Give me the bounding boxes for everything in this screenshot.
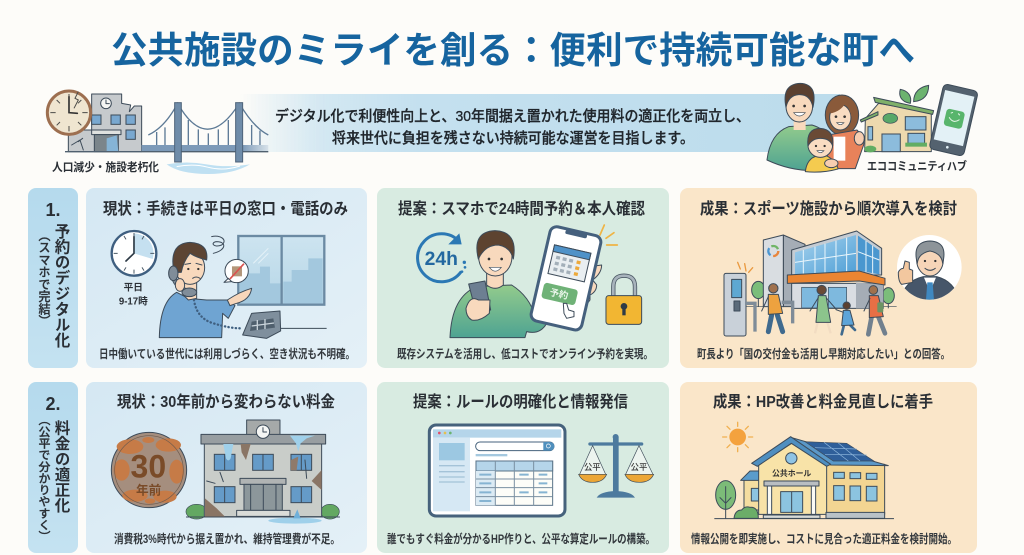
caption: 消費税3%時代から据え置かれ、維持管理費が不足。 [114,531,340,546]
heading: 現状：30年前から変わらない料金 [117,392,335,411]
illustration: fee web page and scales: 公平 [631,462,647,472]
panel: result, row 1 [680,188,977,368]
row 1 label: reservation digitalization: （スマホで完結） [37,229,51,327]
icon: aging facilities, clock and bridge [47,91,268,174]
illustration: 24-hour smartphone booking [418,225,642,338]
banner band [240,94,840,152]
row 2 label: fee optimization: 2. [45,394,61,414]
illustration: sun and public hall with solar roof [714,422,894,519]
title: 公共施設のミライを創る：便利で持続可能な町へ [111,30,915,71]
illustration: 24-hour smartphone booking: 24h [425,249,458,270]
caption: 既存システムを活用し、低コストでオンライン予約を実現。 [397,346,653,361]
illustration: sports facility and mayor [724,231,962,336]
row 2 label: fee optimization: 料金の適正化 [52,420,70,513]
illustration: phone-only weekday reception: 9-17時 [119,295,148,307]
caption: 日中働いている世代には利用しづらく、空き状況も不明確。 [99,346,355,361]
caption: 誰でもすぐ料金が分かるHP作りと、公平な算定ルールの構築。 [387,531,655,546]
illustration: rusty coin and aging building: 30 [131,449,166,485]
heading: 成果：HP改善と料金見直しに着手 [713,392,933,411]
heading: 成果：スポーツ施設から順次導入を検討 [700,199,957,218]
label: population decline: 人口減少・施設老朽化 [52,160,159,174]
panel: current state, row 2 [86,382,367,553]
row 2 label: fee optimization [28,382,78,553]
icon: family, eco community hub and smartphone [767,83,978,172]
row 1 label: reservation digitalization: 予約のデジタル化 [52,223,70,348]
heading: 現状：手続きは平日の窓口・電話のみ [103,199,348,218]
panel: proposal, row 2 [377,382,669,553]
illustration: phone-only weekday reception [112,231,327,338]
banner text: デジタル化で利便性向上と、30年間据え置かれた使用料の適正化を両立し、 [275,107,750,125]
illustration: sun and public hall with solar roof: 公共ホール [772,468,811,478]
panel: result, row 2 [680,382,977,553]
row 1 label: reservation digitalization: 1. [45,200,61,220]
caption: 情報公開を即実施し、コストに見合った適正料金を検討開始。 [691,531,957,546]
heading: 提案：スマホで24時間予約＆本人確認 [398,199,645,218]
row 1 label: reservation digitalization [28,188,78,368]
illustration: rusty coin and aging building: 年前 [136,482,162,497]
caption: 町長より「国の交付金も活用し早期対応したい」との回答。 [697,346,950,361]
illustration: fee web page and scales: 公平 [584,462,601,472]
heading: 提案：ルールの明確化と情報発信 [413,392,628,411]
banner text [275,107,750,147]
banner text: 将来世代に負担を残さない持続可能な運営を目指します。 [332,129,694,147]
label: eco community hub: エココミュニティハブ [867,159,967,173]
illustration: rusty coin and aging building [111,420,340,524]
illustration: phone-only weekday reception: 平日 [124,283,143,294]
panel: proposal, row 1 [377,188,669,368]
illustration: fee web page and scales [429,425,654,516]
panel: current state, row 1 [86,188,367,368]
row 2 label: fee optimization: （公平で分かりやすく） [37,414,51,542]
illustration: 24-hour smartphone booking: 予約 [549,286,569,301]
